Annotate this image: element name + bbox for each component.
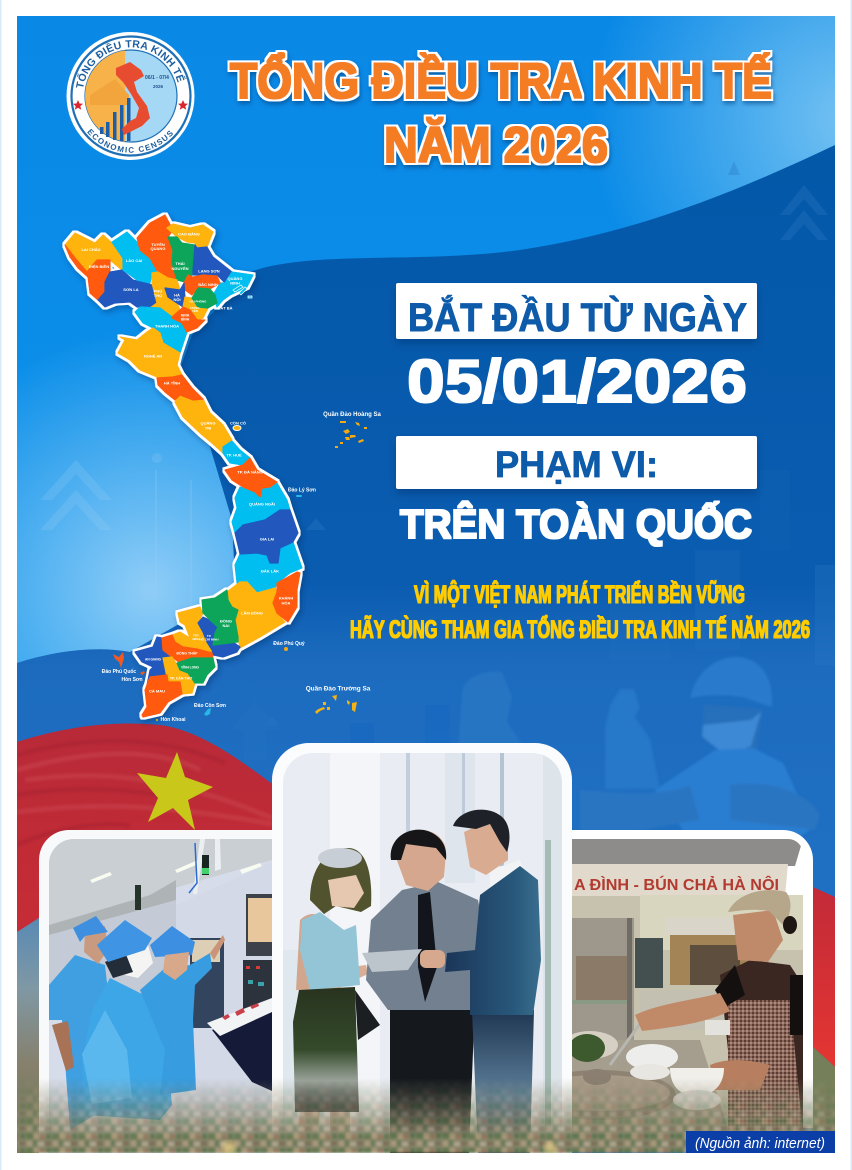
province labels: TP. — [207, 634, 211, 638]
machine opening — [190, 938, 224, 1028]
flag star — [137, 752, 213, 830]
background chart arrows and bars — [306, 162, 835, 600]
province labels: PHÚ — [154, 288, 162, 294]
province labels: CÀ MAU — [149, 688, 165, 694]
logo: economic census seal: 2026 — [153, 84, 164, 89]
vendor body — [720, 960, 803, 1135]
woman top — [300, 912, 360, 990]
vendor head and scarf — [733, 910, 783, 962]
province labels: LÀO CAI — [126, 258, 142, 263]
photo card: business people — [272, 743, 572, 1153]
province labels: CAO BẰNG — [178, 232, 200, 236]
province labels: HÀ — [174, 292, 180, 298]
province labels: Đảo Phú Quốc — [102, 668, 136, 675]
province labels: CỒN CỎ — [230, 420, 246, 426]
province labels: Đảo Phú Quý — [273, 641, 305, 647]
Hòn Khoai island — [156, 719, 158, 721]
province labels: NGUYÊN — [171, 266, 189, 271]
shop banner — [572, 864, 788, 896]
province labels: BÌNH — [181, 316, 190, 322]
province labels: HÒA — [282, 600, 291, 606]
red flag left — [17, 724, 275, 932]
scope label box: PHẠM VI: — [495, 444, 658, 485]
tablet — [362, 949, 422, 972]
province labels: TÂY — [193, 632, 199, 638]
province labels: ĐỒNG THÁP — [176, 650, 198, 656]
console and hopper — [212, 1005, 272, 1091]
Hòn Sơn island — [140, 671, 145, 675]
hands — [420, 950, 445, 968]
photo card: factory workers — [39, 830, 272, 1153]
background workers — [605, 689, 660, 789]
vendor arm — [635, 993, 730, 1031]
province labels: NINH — [181, 314, 190, 318]
Cồn Cỏ island — [233, 426, 241, 430]
province labels: YÊN — [192, 308, 198, 313]
logo: economic census seal — [66, 32, 194, 160]
province labels: QUẢNG — [201, 420, 215, 426]
city strip left — [17, 918, 39, 1153]
province labels: ĐẮK LẮK — [261, 568, 279, 574]
province labels: Quần Đảo Hoàng Sa — [323, 412, 381, 418]
province labels: NAI — [223, 623, 229, 628]
worker face and mask — [704, 705, 762, 748]
province labels: QUẢNG NGÃI — [249, 502, 275, 506]
province labels: HÀ TĨNH — [164, 380, 180, 386]
province labels: QUẢNG — [228, 276, 242, 281]
man right shirt — [490, 860, 524, 900]
province labels: NGHỆ AN — [144, 354, 162, 358]
Phú Quý island — [284, 647, 288, 651]
man centre shirt — [366, 882, 490, 1010]
worker shirt and arms — [655, 748, 813, 840]
slogan — [350, 579, 810, 644]
city lights — [222, 1141, 556, 1155]
province labels: NỘI — [173, 297, 181, 302]
man centre pants — [390, 1000, 475, 1153]
logo bars — [100, 98, 130, 141]
street scene — [640, 895, 803, 950]
Hoàng Sa archipelago — [335, 421, 367, 448]
Phú Quốc island — [113, 652, 124, 668]
province labels: TP. CẦN THƠ — [170, 676, 192, 680]
woman arm — [296, 914, 324, 990]
province labels: ĐIỆN BIÊN — [89, 264, 109, 269]
map of Vietnam provinces — [65, 215, 302, 717]
window columns — [330, 753, 380, 1153]
logo circular english: ECONOMIC CENSUS — [87, 128, 173, 153]
province labels: LẠNG SƠN — [198, 268, 220, 274]
roof — [572, 839, 803, 866]
Lý Sơn island — [296, 495, 302, 497]
province labels: HỒ CHÍ MINH — [200, 636, 218, 642]
soup pot — [572, 1070, 676, 1119]
province labels: NINH — [192, 637, 200, 641]
title — [230, 52, 772, 173]
province labels: VĨNH LONG — [181, 664, 199, 670]
islands — [113, 285, 367, 721]
woman hair — [310, 848, 371, 914]
scope value: TRÊN TOÀN QUỐC — [400, 501, 752, 547]
city skyline at the bottom — [17, 1040, 835, 1153]
logo building — [90, 79, 129, 105]
signal light — [202, 855, 209, 875]
ladle — [609, 1024, 640, 1066]
province labels: HƯNG — [190, 306, 200, 310]
province labels: TP. HUẾ — [226, 452, 242, 458]
right side strip — [813, 1047, 835, 1131]
machine panels — [176, 862, 272, 1153]
province labels: Quần Đảo Trường Sa — [306, 684, 371, 692]
province labels: Hòn Khoai — [160, 717, 186, 723]
province labels: Hòn Sơn — [121, 677, 143, 683]
pale arrows on light area — [40, 453, 192, 551]
logo circular title: TỔNG ĐIỀU TRA KINH TẾ — [76, 40, 186, 88]
photo source label: (Nguồn ảnh: internet) — [695, 1136, 825, 1152]
woman face — [328, 875, 364, 908]
faded worker background photo — [457, 657, 820, 840]
man right head — [464, 818, 508, 875]
province labels: SƠN LA — [123, 287, 139, 292]
factory ceiling — [49, 839, 272, 925]
province labels: AN GIANG — [145, 658, 161, 662]
province labels: LÂM ĐỒNG — [241, 610, 263, 616]
province labels: Đảo Lý Sơn — [288, 488, 316, 494]
man centre head — [395, 830, 446, 891]
flag folds — [17, 754, 272, 824]
red flag right — [813, 887, 835, 1067]
province labels: LAI CHÂU — [81, 247, 101, 252]
Trường Sa archipelago — [315, 695, 357, 714]
man right pants — [472, 1010, 534, 1153]
banner text: A ĐÌNH - BÚN CHẢ HÀ NỘI — [574, 875, 779, 894]
Quảng Ninh islets — [233, 285, 252, 298]
photo card: food vendor — [572, 830, 813, 1134]
title line 1: TỔNG ĐIỀU TRA KINH TẾ — [230, 52, 772, 109]
bowls — [670, 1068, 724, 1092]
herbs and noodles — [572, 1031, 618, 1058]
machine screen — [246, 894, 272, 956]
food shelf — [572, 918, 634, 1040]
worker centre — [94, 978, 172, 1120]
province labels: QUANG — [151, 246, 165, 251]
logo dates: 06/1 - 07/4 — [145, 75, 169, 81]
province labels: THANH HÓA — [155, 324, 179, 328]
province labels: Đảo Côn Sơn — [194, 703, 226, 709]
province labels: TP. ĐÀ NẴNG — [237, 470, 263, 474]
province labels: TUYÊN — [151, 242, 165, 247]
province labels: KHÁNH — [279, 596, 293, 600]
province labels: NINH — [230, 280, 240, 286]
counter — [572, 1040, 726, 1125]
scope label box — [396, 436, 757, 489]
start date label box: BẮT ĐẦU TỪ NGÀY — [408, 294, 747, 340]
logo vietnam map — [116, 62, 150, 135]
control panel — [243, 960, 272, 1010]
worker hat — [690, 657, 772, 707]
worker right — [140, 953, 212, 1095]
logo left half — [85, 50, 125, 142]
province labels: THỌ — [154, 293, 162, 298]
province labels: GIA LAI — [260, 536, 274, 542]
province labels: ĐỒNG — [220, 618, 232, 624]
province labels: HẢI PHÒNG — [189, 298, 207, 304]
woman legs — [294, 1112, 350, 1152]
worker left — [49, 955, 107, 1130]
province labels: TRỊ — [205, 426, 211, 430]
province labels: CÁT BÀ — [217, 306, 233, 310]
province labels: BẮC NINH — [198, 282, 218, 287]
Côn Sơn island — [204, 708, 211, 716]
photo source label — [686, 1131, 835, 1153]
start date: 05/01/2026 — [407, 348, 747, 415]
title line 2: NĂM 2026 — [384, 117, 608, 173]
province labels: THÁI — [175, 261, 185, 266]
man right sweater — [445, 866, 541, 1015]
woman skirt — [293, 987, 359, 1112]
logo stars — [73, 100, 188, 110]
province labels — [81, 232, 381, 723]
